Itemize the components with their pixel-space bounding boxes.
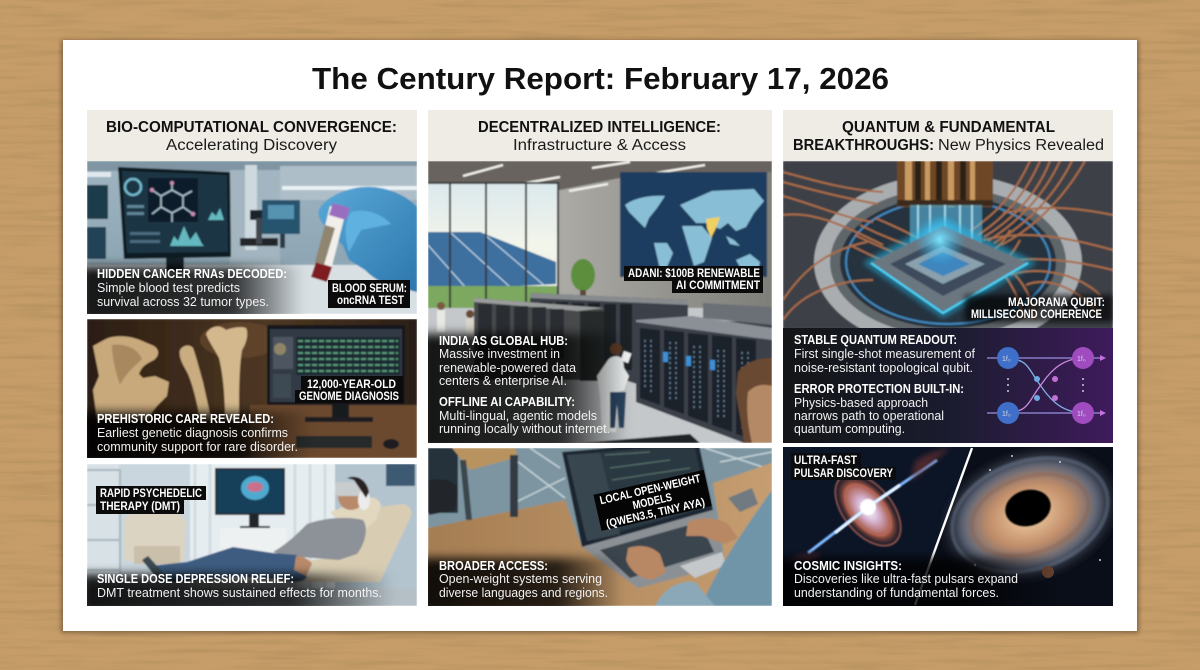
label: ultra-fast pulsar discovery: PULSAR DISCOVERY — [794, 468, 893, 480]
label: majorana qubit: MILLISECOND COHERENCE — [971, 309, 1102, 321]
column 3 heading — [783, 110, 1113, 161]
caption: error protection: Physics-based approach — [794, 396, 928, 410]
label: Adani commitment: ADANI: $100B RENEWABLE — [628, 268, 760, 280]
panel: India data centers — [420, 161, 772, 452]
label: rapid psychedelic therapy — [96, 486, 206, 514]
panel: prehistoric care — [80, 319, 417, 466]
diagram: qubit circuit: 1f₀ — [1002, 411, 1011, 418]
caption: hidden cancer RNAs: survival across 32 tumor types. — [97, 295, 269, 309]
caption: broader access: diverse languages and regions. — [439, 586, 608, 600]
dark caption fade — [420, 558, 623, 614]
image: lab with monitor and blood tube — [87, 161, 417, 314]
caption: stable quantum readout: STABLE QUANTUM READOUT: — [794, 333, 957, 347]
caption: offline AI capability: running locally without internet. — [439, 422, 610, 436]
diagram: qubit circuit: 1f₀ — [1077, 411, 1086, 418]
label: local open-weight models: (QWEN3.5, TINY AYA) — [605, 497, 706, 531]
panel: broader access — [428, 448, 772, 606]
label: ultra-fast pulsar discovery — [791, 453, 896, 480]
caption: single dose: SINGLE DOSE DEPRESSION RELIEF: — [97, 572, 294, 586]
caption: hidden cancer RNAs: HIDDEN CANCER RNAs DECODED: — [97, 267, 287, 281]
label: genome diagnosis: 12,000-YEAR-OLD — [307, 379, 396, 391]
image: man reclining with VR headset — [87, 464, 417, 606]
column 1 heading: Accelerating Discovery — [166, 137, 337, 154]
column 1: bio-computational convergence — [80, 110, 417, 614]
image: pulsar and black hole — [783, 447, 1113, 606]
label: rapid psychedelic therapy: RAPID PSYCHEDELIC — [100, 488, 202, 500]
caption: cosmic insights — [794, 559, 1018, 600]
diagram: qubit circuit: 1f₀ — [1077, 356, 1086, 363]
label: local open-weight models: LOCAL OPEN-WEIGHT — [599, 473, 702, 507]
caption: cosmic insights: understanding of fundamental forces. — [794, 586, 999, 600]
caption: single dose — [97, 574, 381, 597]
caption: offline AI capability: OFFLINE AI CAPABILITY: — [439, 395, 575, 409]
caption: stable quantum readout — [794, 333, 976, 375]
caption: error protection — [794, 382, 964, 436]
caption: broader access: BROADER ACCESS: — [439, 559, 548, 573]
column 2: decentralized intelligence — [420, 110, 772, 614]
label: local open-weight models — [593, 470, 712, 532]
panel: quantum readout text and diagram — [783, 328, 1113, 443]
title: The Century Report: February 17, 2026 — [312, 61, 889, 96]
caption: error protection: quantum computing. — [794, 422, 905, 436]
caption: prehistoric care: PREHISTORIC CARE REVEALED: — [97, 412, 274, 426]
label: majorana qubit: MAJORANA QUBIT: — [1008, 297, 1105, 309]
caption: cosmic insights: COSMIC INSIGHTS: — [794, 559, 902, 573]
label: genome diagnosis — [295, 376, 403, 403]
label: blood serum: oncRNA TEST — [337, 295, 404, 307]
dark caption fade — [80, 412, 312, 466]
caption: offline AI capability — [439, 395, 610, 436]
label: Adani commitment: AI COMMITMENT — [676, 280, 760, 292]
caption: hidden cancer RNAs — [97, 267, 287, 309]
caption: prehistoric care: community support for rare disorder. — [97, 440, 298, 454]
caption: India as global hub: centers & enterprise AI. — [439, 374, 567, 388]
label: genome diagnosis: GENOME DIAGNOSIS — [299, 391, 399, 403]
column 2 heading — [428, 110, 772, 161]
column 3 heading: BREAKTHROUGHS: — [793, 137, 934, 154]
panel: hidden cancer RNAs — [80, 161, 417, 322]
column 3: quantum and fundamental breakthroughs — [783, 110, 1113, 606]
column 2 heading: DECENTRALIZED INTELLIGENCE: — [478, 119, 721, 136]
image: data center with solar panels and world map — [428, 161, 772, 443]
panel: cosmic insights — [783, 447, 1113, 606]
panel: DMT therapy — [80, 464, 417, 614]
caption: hidden cancer RNAs: Simple blood test predicts — [97, 281, 240, 295]
image: ancient bones and genome monitor — [87, 319, 417, 458]
caption: India as global hub: Massive investment in — [439, 347, 560, 361]
label: local open-weight models: MODELS — [632, 492, 674, 512]
caption: offline AI capability: Multi-lingual, agentic models — [439, 409, 597, 423]
column 3 heading: New Physics Revealed — [938, 137, 1104, 154]
white report card — [61, 40, 1139, 633]
caption: prehistoric care — [97, 412, 298, 454]
caption: stable quantum readout: noise-resistant topological qubit. — [794, 361, 973, 375]
column 1 heading: BIO-COMPUTATIONAL CONVERGENCE: — [106, 119, 397, 136]
dark caption fade — [80, 574, 394, 614]
label: blood serum: BLOOD SERUM: — [332, 283, 407, 295]
label: rapid psychedelic therapy: THERAPY (DMT) — [100, 501, 180, 513]
column 3 heading: QUANTUM & FUNDAMENTAL — [842, 119, 1055, 136]
column 1 heading — [87, 110, 417, 161]
caption: India as global hub — [439, 334, 576, 388]
diagram: qubit circuit — [987, 347, 1106, 424]
caption: prehistoric care: Earliest genetic diagnosis confirms — [97, 426, 288, 440]
caption: broader access: Open-weight systems serving — [439, 572, 602, 586]
label: blood serum — [328, 280, 410, 308]
dark caption fade — [775, 558, 1060, 614]
image: quantum chip with copper wires — [783, 161, 1113, 328]
label: majorana qubit — [965, 295, 1113, 322]
caption: cosmic insights: Discoveries like ultra-fast pulsars expand — [794, 572, 1018, 586]
image: laptop on wooden desk — [428, 440, 772, 606]
caption: India as global hub: renewable-powered data — [439, 361, 576, 375]
label: ultra-fast pulsar discovery: ULTRA-FAST — [794, 455, 857, 467]
panel: majorana qubit image — [783, 161, 1113, 328]
dark caption fade — [420, 334, 628, 452]
caption: error protection: narrows path to operational — [794, 409, 944, 423]
caption: broader access — [439, 559, 608, 600]
caption: India as global hub: INDIA AS GLOBAL HUB: — [439, 334, 568, 348]
column 2 heading: Infrastructure & Access — [513, 137, 686, 154]
diagram: qubit circuit: 1f₀ — [1002, 356, 1011, 363]
divider between pulsar and black hole — [915, 448, 972, 605]
dark caption fade — [80, 266, 304, 322]
label: Adani commitment — [624, 266, 763, 293]
caption: error protection: ERROR PROTECTION BUILT-IN: — [794, 382, 964, 396]
caption: stable quantum readout: First single-shot measurement of — [794, 347, 976, 361]
caption: single dose: DMT treatment shows sustained effects for months. — [97, 586, 382, 600]
